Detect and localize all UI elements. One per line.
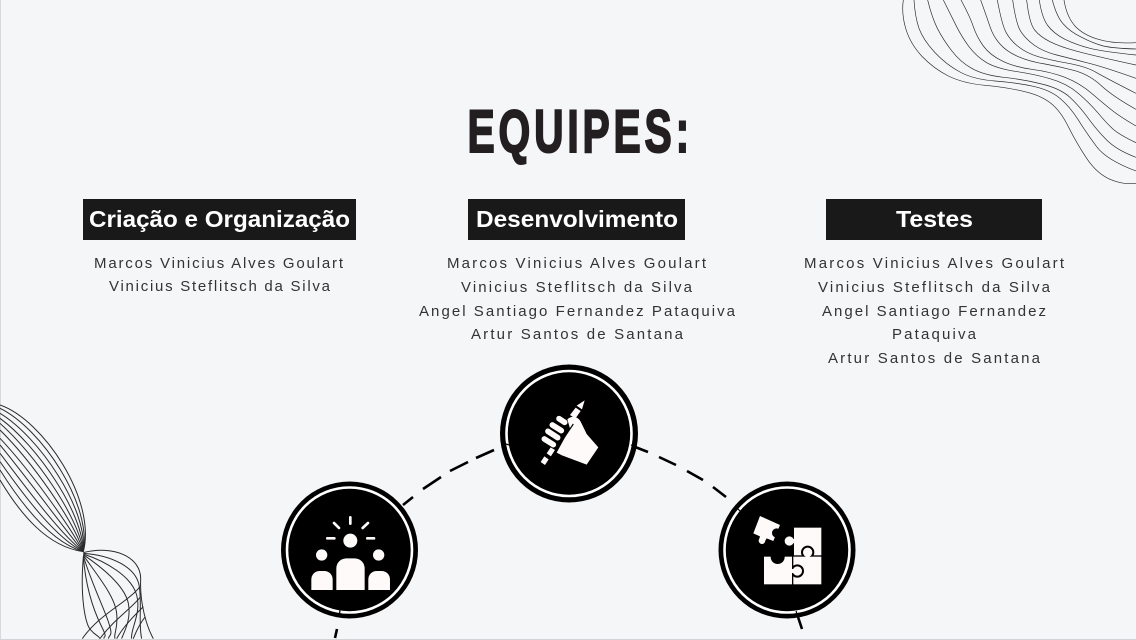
column: Criação e Organização [83, 199, 356, 295]
icon: hand holding pencil [500, 364, 638, 502]
title: EQUIPES: [468, 98, 689, 165]
heading badge: Testes [826, 199, 1042, 240]
member list: Desenvolvimento: Artur Santos de Santana [471, 326, 684, 343]
column: Testes [804, 199, 1065, 367]
member list: Testes [804, 255, 1065, 367]
member list: Desenvolvimento [419, 255, 736, 343]
member list: Testes: Artur Santos de Santana [828, 350, 1041, 367]
column: Desenvolvimento [419, 199, 736, 343]
member list: Criação e Organização: Vinicius Steflitsch da Silva [109, 278, 331, 295]
member list: Criação e Organização [94, 255, 344, 295]
heading badge: Criação e Organização: Criação e Organização [89, 206, 350, 232]
member list: Desenvolvimento: Vinicius Steflitsch da Silva [461, 279, 693, 296]
member list: Testes: Pataquiva [892, 326, 977, 343]
decorative contour waves: top right [903, 0, 1136, 184]
heading badge: Testes: Testes [896, 206, 973, 232]
icon: puzzle pieces [718, 482, 856, 618]
member list: Testes: Angel Santiago Fernandez [822, 303, 1046, 320]
icon: team with idea [281, 482, 418, 618]
member list: Criação e Organização: Marcos Vinicius Alves Goulart [94, 255, 344, 272]
heading badge: Desenvolvimento: Desenvolvimento [476, 206, 678, 232]
decorative twisted ribbon lines: bottom left [0, 405, 153, 639]
member list: Desenvolvimento: Angel Santiago Fernandez Pataquiva [419, 303, 736, 320]
member list: Testes: Marcos Vinicius Alves Goulart [804, 255, 1065, 272]
member list: Testes: Vinicius Steflitsch da Silva [818, 279, 1051, 296]
heading badge: Desenvolvimento [468, 199, 685, 240]
dashed connector arc [335, 445, 802, 638]
member list: Desenvolvimento: Marcos Vinicius Alves Goulart [447, 255, 707, 272]
heading badge: Criação e Organização [83, 199, 356, 240]
